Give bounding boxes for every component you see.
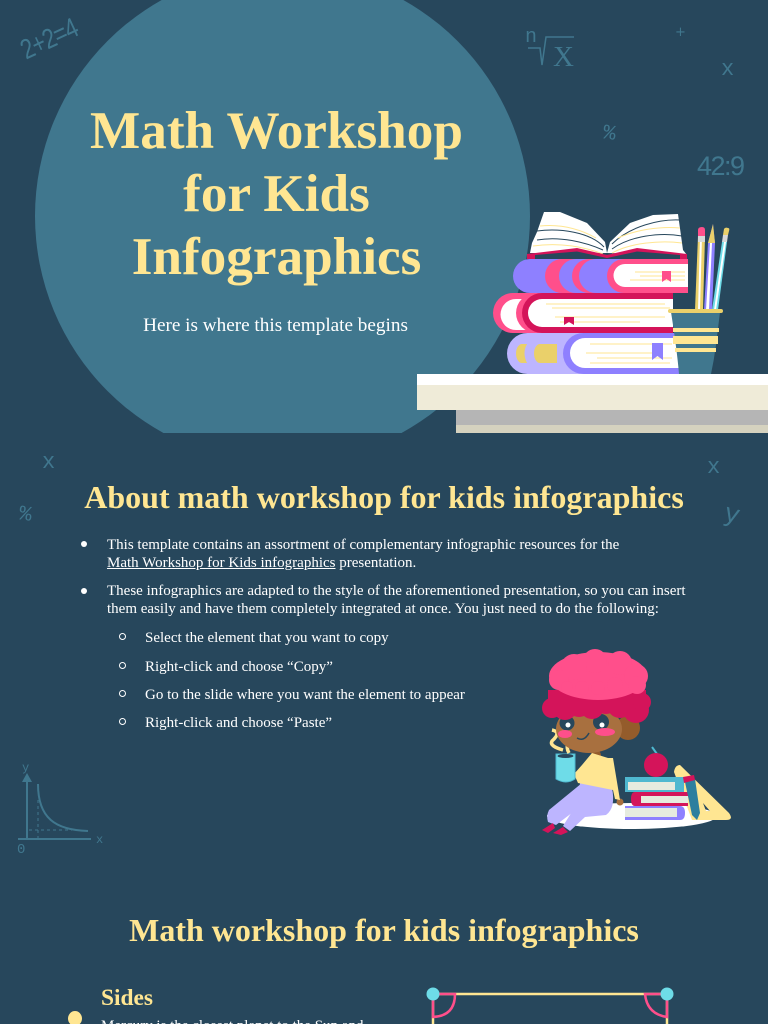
middle book xyxy=(493,293,673,333)
math doodle: nth root of x: n xyxy=(525,26,537,49)
math doodle: x left: x xyxy=(42,450,55,475)
math doodle: 2+2=4: 2+2=4 xyxy=(15,12,83,65)
sub text 1: Select the element that you want to copy xyxy=(145,630,389,646)
bullet 1 xyxy=(81,541,87,547)
main title: for Kids xyxy=(183,164,370,223)
far leg xyxy=(547,783,585,825)
sides marker xyxy=(68,1011,82,1024)
math doodle: nth root of x xyxy=(525,26,574,73)
main title xyxy=(90,101,463,286)
shoes xyxy=(542,823,568,835)
faded graph: 0 xyxy=(17,842,25,858)
bullet 2 text: them easily and have them completely integrated at once. You just need to do the following: xyxy=(107,601,659,617)
pencils xyxy=(695,224,729,310)
math doodle: percent left: % xyxy=(17,503,33,528)
bullet 1 text xyxy=(107,537,619,571)
trousers xyxy=(563,783,613,831)
sub bullet 2 xyxy=(119,662,126,669)
math doodle: y right: y xyxy=(720,498,743,532)
faded graph: y xyxy=(22,761,29,775)
math doodle: x top right: x xyxy=(721,57,734,82)
hero circle xyxy=(35,0,530,464)
sides label: Sides xyxy=(101,985,153,1011)
face xyxy=(556,705,640,753)
bottom book xyxy=(507,333,679,374)
bullet 1 text: Math Workshop for Kids infographics presentation. xyxy=(107,555,416,571)
bullet list xyxy=(81,537,686,731)
bullet 1 text: This template contains an assortment of complementary infographic resources for the xyxy=(107,537,619,553)
sub text 3: Go to the slide where you want the element to appear xyxy=(145,687,465,703)
hand xyxy=(616,798,624,806)
main title: Math Workshop xyxy=(90,101,463,160)
sub bullet 1 xyxy=(119,633,126,640)
hair xyxy=(542,649,651,723)
bullet 2 text xyxy=(107,583,686,617)
stack of books xyxy=(625,777,688,820)
math doodle: 42:9: 42:9 xyxy=(697,151,744,181)
illustration: child with mug and books xyxy=(542,649,731,835)
section heading: about: About math workshop for kids infographics xyxy=(84,479,684,515)
white floor xyxy=(547,803,717,829)
neck xyxy=(591,750,601,760)
bullet 2 text: These infographics are adapted to the style of the aforementioned presentation, so you can insert xyxy=(107,583,686,599)
shelf xyxy=(417,374,768,433)
sub bullet 3 xyxy=(119,690,126,697)
mug xyxy=(551,730,575,782)
pencil cup xyxy=(668,309,723,374)
top book xyxy=(513,259,688,293)
subtitle: Here is where this template begins xyxy=(143,315,408,336)
sweater xyxy=(574,753,620,800)
main title: Infographics xyxy=(132,227,421,286)
math doodle: percent top: % xyxy=(601,122,617,147)
illustration: books, pencil cup and shelf xyxy=(417,212,768,433)
faded graph xyxy=(17,761,103,858)
faded graph: x xyxy=(96,833,103,847)
math doodle: plus: + xyxy=(675,25,686,40)
sub text 4: Right-click and choose “Paste” xyxy=(145,715,332,731)
math doodle: nth root of x: X xyxy=(553,41,574,73)
math doodle: x right: x xyxy=(707,455,720,480)
sub bullet 4 xyxy=(119,718,126,725)
section heading: bottom: Math workshop for kids infographics xyxy=(129,912,639,948)
triangle ruler xyxy=(674,765,731,820)
square diagram xyxy=(426,988,674,1024)
small pencil xyxy=(683,775,700,820)
open book xyxy=(527,212,687,259)
bullet 2 xyxy=(81,588,87,594)
sub text 2: Right-click and choose “Copy” xyxy=(145,659,333,675)
apple xyxy=(644,747,668,777)
